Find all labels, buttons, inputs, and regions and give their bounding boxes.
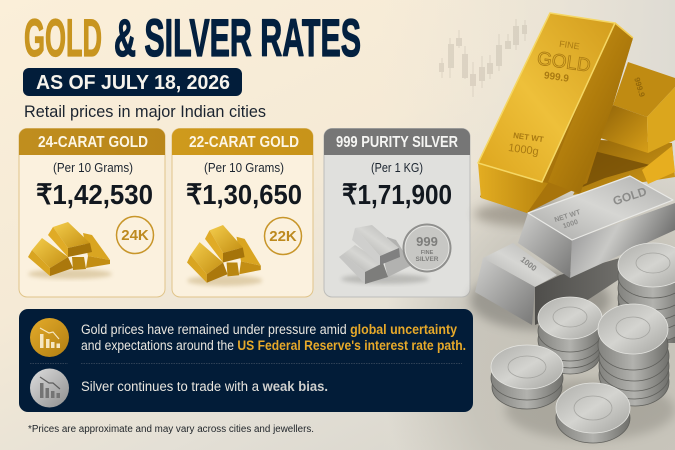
upper silver bar: GOLD [611, 184, 649, 208]
panel: 24-carat gold [19, 128, 165, 297]
badge: 22K: 22K [269, 228, 297, 245]
image: silver coins [491, 243, 675, 443]
lower silver bar: 1000 [519, 255, 539, 273]
coin stack back right [618, 243, 675, 343]
price: 24-carat: ₹1,42,530 [36, 179, 153, 210]
subtitle: Retail prices in major Indian cities [24, 103, 266, 121]
badge: 24K: 24K [121, 227, 149, 244]
icon: gold bars [28, 222, 112, 279]
panel: market commentary [19, 309, 473, 412]
coin stack left [491, 345, 563, 409]
title [24, 9, 361, 68]
image: gold bars [474, 13, 675, 227]
lower silver bar [475, 243, 620, 325]
panel: 22-carat gold: 22-CARAT GOLD [189, 134, 299, 151]
bar engraving: FINE [559, 39, 580, 51]
price: silver: ₹1,71,900 [342, 179, 452, 210]
badge: 22K [264, 218, 302, 254]
panel: 999 purity silver [324, 128, 470, 297]
icon: silver falling chart [30, 368, 69, 408]
coin front [556, 383, 630, 443]
panel: 22-carat gold [172, 128, 313, 297]
gold bar behind, upper: 999.9 [632, 76, 647, 99]
main gold bar [478, 13, 633, 213]
icon: silver coin: 999 [416, 234, 438, 249]
icon: silver bars [339, 225, 429, 284]
date pill: AS OF JULY 18, 2026 [36, 71, 230, 94]
bar engraving: 999.9 [543, 70, 570, 85]
gold bar behind, lower [573, 140, 675, 195]
header: 24-carat [19, 128, 165, 155]
text: gold commentary: Gold prices have remained under pressure amid global uncertainty [81, 322, 457, 337]
bar engraving [507, 39, 592, 158]
text: gold commentary [81, 322, 466, 353]
candlestick chart backdrop [439, 19, 527, 97]
title: GOLD [24, 9, 102, 68]
icon: gold bars [187, 225, 263, 286]
upper silver bar [518, 176, 675, 278]
coin stack tall right [598, 304, 669, 406]
panel: 999 purity silver: 999 PURITY SILVER [336, 134, 458, 151]
gold bar behind, upper [597, 62, 675, 153]
footnote: *Prices are approximate and may vary across cities and jewellers. [28, 424, 314, 435]
icon: gold falling chart [30, 318, 69, 357]
price: 22-carat: ₹1,30,650 [186, 179, 302, 210]
bar engraving: NET WT [513, 131, 544, 144]
coin stack centre [538, 297, 602, 374]
panel: 999 purity silver: (Per 1 KG) [371, 161, 423, 175]
bar engraving: GOLD [536, 48, 592, 77]
icon: silver coin: SILVER [416, 256, 439, 263]
title: & SILVER RATES [114, 9, 361, 68]
header: silver [324, 128, 470, 155]
icon: silver coin [402, 224, 452, 272]
icon: silver coin: FINE [421, 250, 434, 256]
panel: 22-carat gold: (Per 10 Grams) [204, 161, 284, 175]
header: 22-carat [172, 128, 313, 155]
panel: 24-carat gold: (Per 10 Grams) [53, 161, 133, 175]
text: gold commentary: and expectations around the US Federal Reserve's interest rate path. [81, 338, 466, 353]
text: silver commentary: Silver continues to trade with a weak bias. [81, 379, 328, 394]
bar engraving: 1000g [507, 142, 539, 158]
upper silver bar: NET WT [554, 209, 582, 224]
upper silver bar: 1000 [562, 219, 579, 230]
badge: 24K [116, 216, 154, 254]
image: silver bars [470, 176, 675, 330]
divider [30, 362, 462, 364]
panel: 24-carat gold: 24-CARAT GOLD [38, 134, 148, 151]
